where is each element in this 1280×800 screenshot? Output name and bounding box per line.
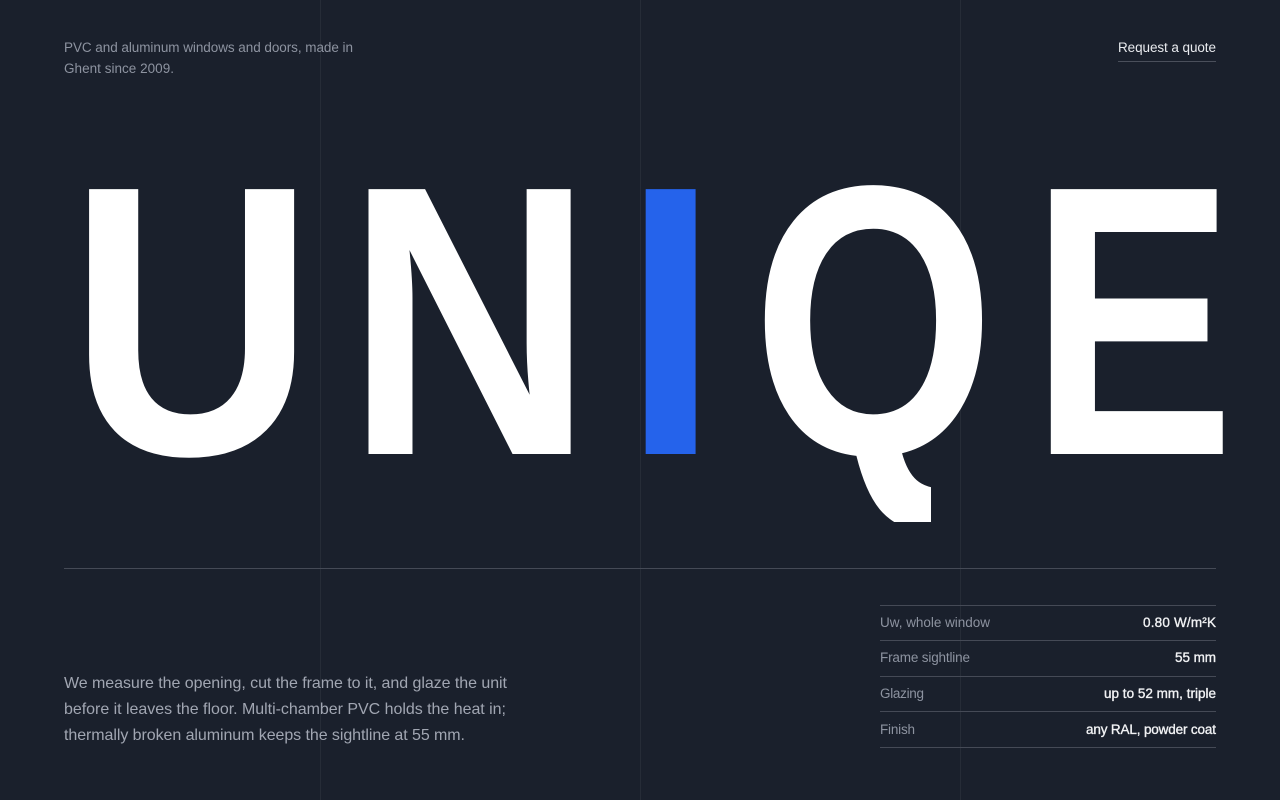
tagline: Ghent since 2009. bbox=[64, 61, 174, 76]
wordmark: UNIQE bbox=[89, 185, 1223, 522]
row: sightline: 55 mm bbox=[1175, 650, 1216, 665]
row: Uw: 0.80 W/m²K bbox=[1143, 615, 1216, 630]
row: finish: any RAL, powder coat bbox=[1086, 722, 1216, 737]
letter Q: Q bbox=[752, 107, 995, 536]
row: Uw bbox=[880, 615, 1216, 630]
description paragraph: before it leaves the floor. Multi-chamber PVC holds the heat in; bbox=[64, 701, 506, 718]
tagline: PVC and aluminum windows and doors, made in bbox=[64, 40, 353, 55]
description paragraph: We measure the opening, cut the frame to it, and glaze the unit bbox=[64, 675, 508, 692]
spec table bbox=[880, 605, 1216, 748]
letter U: U bbox=[69, 107, 315, 537]
tagline bbox=[64, 40, 353, 76]
row: finish: Finish bbox=[880, 722, 915, 737]
row: glazing bbox=[880, 686, 1216, 701]
row: Uw: Uw, whole window bbox=[880, 615, 990, 630]
row: glazing: Glazing bbox=[880, 686, 924, 701]
link: request a quote: Request a quote bbox=[1118, 40, 1216, 55]
row: sightline: Frame sightline bbox=[880, 650, 970, 665]
row: sightline bbox=[880, 650, 1216, 665]
row: glazing: up to 52 mm, triple bbox=[1104, 686, 1216, 701]
row: finish bbox=[880, 722, 1216, 737]
link: request a quote bbox=[1118, 40, 1216, 62]
letter I (blue): I bbox=[622, 105, 719, 536]
description paragraph bbox=[64, 675, 508, 744]
letter E: E bbox=[1030, 105, 1235, 536]
description paragraph: thermally broken aluminum keeps the sightline at 55 mm. bbox=[64, 727, 465, 744]
letter N: N bbox=[346, 107, 594, 536]
